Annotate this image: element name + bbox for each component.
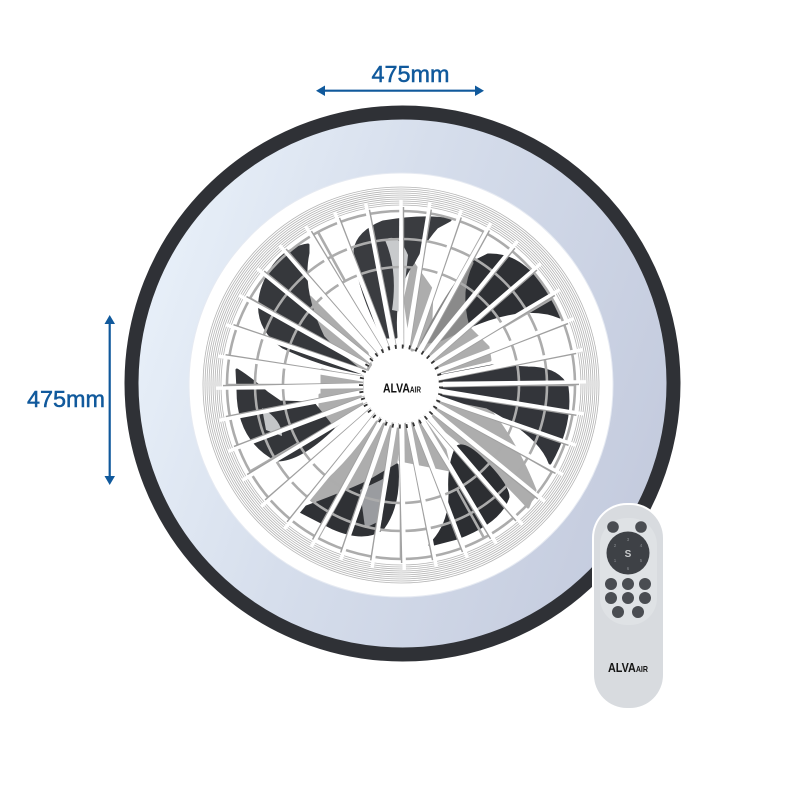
blade: right <box>440 366 568 463</box>
function buttons <box>605 578 651 618</box>
fan unit <box>132 112 674 654</box>
blade: upper right <box>445 255 560 327</box>
fan blades <box>237 218 568 545</box>
speed dial: 5 <box>640 558 643 563</box>
blade: silver inner sections <box>307 263 535 507</box>
height arrow <box>109 321 111 479</box>
remote control <box>592 503 665 710</box>
dimension: width <box>316 61 484 96</box>
blade: upper left <box>260 245 363 373</box>
white inner bezel <box>189 173 613 597</box>
radial spokes <box>216 200 586 570</box>
dimension: height <box>27 315 115 485</box>
outer dark ring <box>132 112 674 654</box>
concentric grille lines <box>203 187 599 583</box>
speed dial: 3 <box>627 537 630 542</box>
blade: bottom left <box>298 465 397 535</box>
width arrow <box>322 90 478 92</box>
blade: top <box>355 218 450 337</box>
speed dial: 2 <box>614 543 617 548</box>
inner guard cage <box>227 211 575 559</box>
remote button panel <box>600 518 657 625</box>
remote halo <box>592 503 665 710</box>
remote body <box>594 505 663 708</box>
blade: left <box>237 370 333 460</box>
hub shadow ticks <box>361 346 441 426</box>
speed dial: 4 <box>640 543 643 548</box>
centre hub <box>365 350 437 422</box>
width label: 475mm <box>372 61 450 87</box>
speed dial: 6 <box>627 566 630 571</box>
height label: 475mm <box>27 386 105 412</box>
hub logo: ALVAAIR <box>383 380 421 396</box>
speed dial: 1 <box>614 558 617 563</box>
blade: bottom <box>430 446 508 545</box>
remote logo: ALVAAIR <box>608 660 648 675</box>
power and light buttons <box>607 521 647 533</box>
speed dial: S <box>625 549 632 560</box>
speed dial <box>606 532 650 574</box>
